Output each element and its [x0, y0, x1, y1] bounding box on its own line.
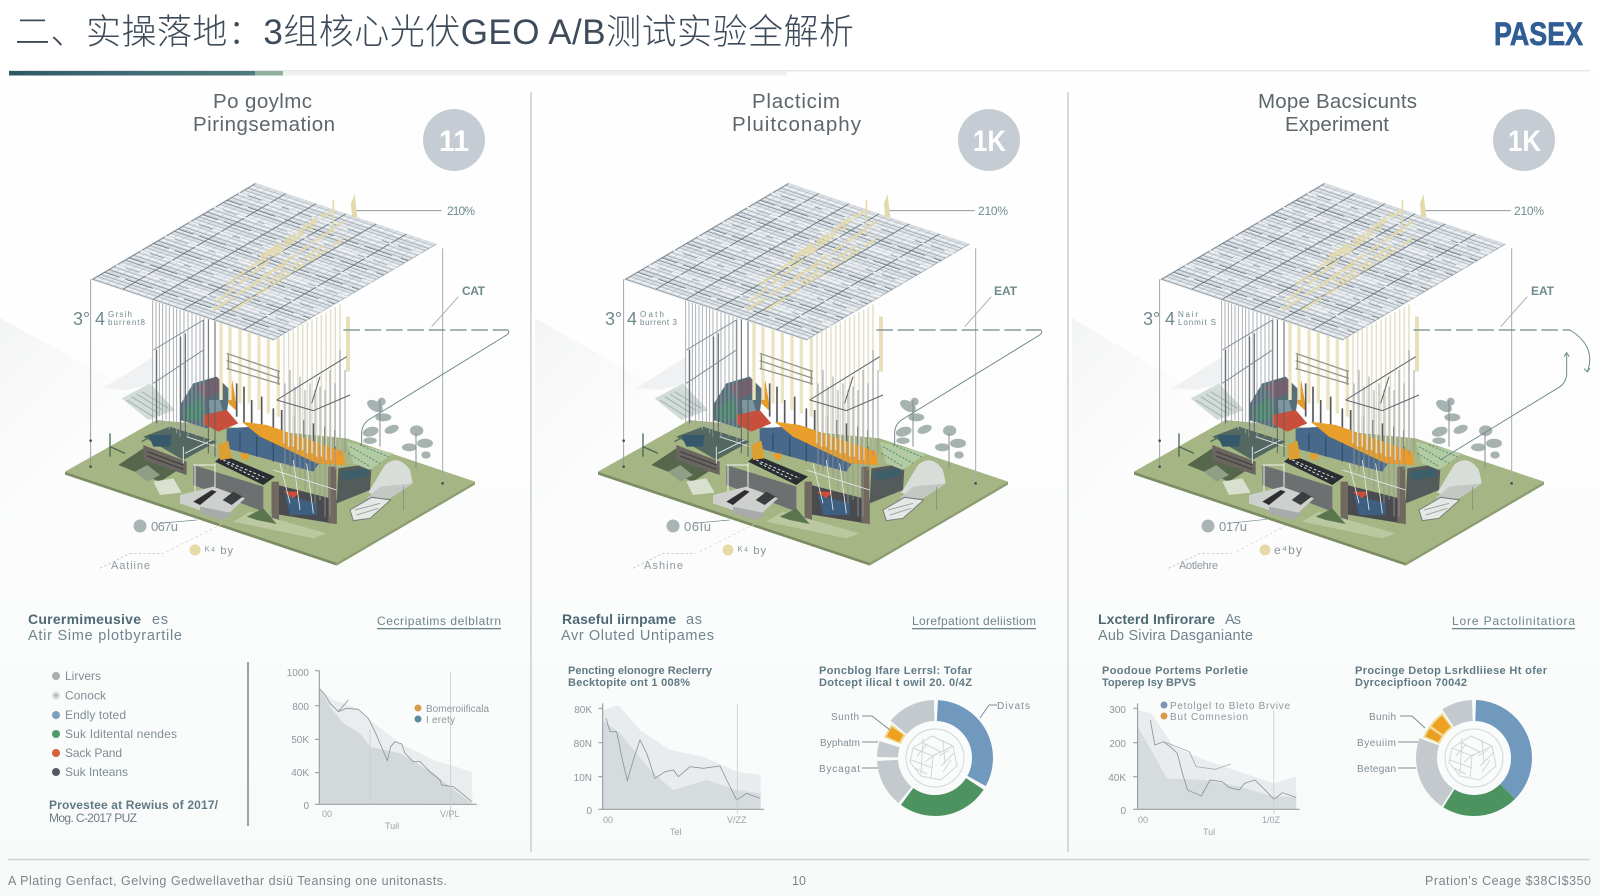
- badge: experiment 3: 1K: [1508, 125, 1541, 158]
- area chart 2: 00: [603, 815, 613, 825]
- annotation labels 3: Aotlehre: [1179, 560, 1218, 572]
- summary heading 2: Raseful iirnpame: [562, 611, 676, 627]
- legend list: Sack Pand: [65, 746, 122, 760]
- link 2: Lorefpationt deliistiom: [912, 614, 1036, 628]
- area chart 2: 80N: [574, 739, 592, 750]
- annotation labels 2: 06Iu: [684, 519, 711, 534]
- chart caption 3b: [1355, 665, 1548, 689]
- area chart 3: But Comnesion: [1170, 712, 1248, 723]
- summary heading 3: As: [1225, 612, 1241, 628]
- link 3: Lore Pactolinitatiora: [1452, 614, 1575, 628]
- annotation leaders 1: [100, 330, 509, 568]
- title: 二、实操落地：3组核心光伏GEO A/B测试实验全解析: [15, 13, 854, 52]
- note 1: Mog. C-2017 PUZ: [49, 811, 137, 825]
- annotation labels 3: 3° 4: [1143, 309, 1175, 329]
- badge: experiment 2: [958, 109, 1020, 171]
- annotation labels 1: [73, 204, 486, 572]
- panel: experiment 3: [1098, 90, 1590, 837]
- note 1: Provestee at Rewius of 2017/: [49, 798, 219, 812]
- area chart 2: 0: [586, 806, 592, 817]
- annotation labels 3: Lonmit S: [1178, 318, 1216, 327]
- area chart 1: 0: [303, 801, 309, 812]
- area chart 1: 50K: [291, 735, 309, 746]
- badge: experiment 1: [423, 109, 485, 171]
- summary heading 2: [561, 611, 714, 644]
- heading: experiment 3: Mope Bacsicunts: [1258, 90, 1417, 113]
- area chart 2: 80K: [574, 705, 592, 716]
- annotation labels 1: 3° 4: [73, 309, 105, 329]
- chart caption 2: [568, 665, 713, 689]
- area chart 1: Bomeroiificala: [426, 704, 489, 715]
- legend list: [52, 669, 177, 779]
- area chart 1: 800: [292, 702, 309, 713]
- summary heading 1: es: [152, 612, 168, 628]
- heading: experiment 2: Placticim: [752, 90, 840, 113]
- area chart 1: 40K: [291, 768, 309, 779]
- badge: experiment 3: [1493, 109, 1555, 171]
- area chart 1: V/PL: [440, 809, 460, 819]
- annotation labels 3: EAT: [1531, 284, 1555, 298]
- chart caption 3: Poodoue Portems Porletie: [1102, 665, 1248, 677]
- summary heading 1: Atir Sime plotbyrartile: [28, 628, 182, 644]
- footer right: Pration's Ceage $38CI$350: [1425, 874, 1591, 888]
- chart caption 2: Becktopite ont 1 008%: [568, 677, 690, 689]
- annotation labels 3: 017u: [1219, 519, 1247, 534]
- annotation labels 1: burrent8: [108, 318, 146, 327]
- summary heading 3: Aub Sivira Dasganiante: [1098, 628, 1253, 644]
- area chart 2: V/ZZ: [727, 815, 747, 825]
- donut chart 2: [819, 701, 1030, 806]
- summary heading 2: Avr Oluted Untipames: [561, 628, 714, 644]
- annotation labels 3: 210%: [1514, 204, 1544, 218]
- area chart 3: 00: [1138, 815, 1148, 825]
- donut chart 2: Divats: [997, 701, 1030, 712]
- annotation labels 3: [1143, 204, 1555, 572]
- chart caption 3b: Procinge Detop Lsrkdliiese Ht ofer: [1355, 665, 1548, 677]
- donut chart 3: Betegan: [1357, 764, 1396, 775]
- annotation labels 2: Ashine: [644, 560, 683, 572]
- badge: experiment 2: 1K: [973, 125, 1006, 158]
- illustration: solar building 2: [598, 183, 1008, 566]
- legend list: Suk Iditental nendes: [65, 727, 177, 741]
- heading: experiment 3: Experiment: [1285, 113, 1389, 136]
- chart caption 3: Toperep Isy BPVS: [1102, 677, 1196, 689]
- annotation labels 1: ᴷ⁴ by: [205, 545, 234, 557]
- chart caption 2b: Poncblog Ifare Lerrsl: Tofar: [819, 665, 973, 677]
- page number: 10: [792, 874, 806, 888]
- annotation labels 1: 210%: [447, 204, 475, 218]
- chart caption 2b: [819, 665, 973, 689]
- panel dividers: [531, 92, 1068, 852]
- chart caption 2b: Dotcept ilical t owil 20. 0/4Z: [819, 677, 972, 689]
- donut chart 3: Bunih: [1369, 712, 1396, 723]
- area chart 3: 0: [1120, 806, 1126, 817]
- annotation labels 1: Aatiine: [111, 560, 150, 572]
- area chart 2: [574, 703, 764, 837]
- area chart 1: I erety: [426, 715, 455, 726]
- heading: experiment 1: [193, 90, 335, 136]
- illustration: solar building 3: [1134, 183, 1544, 566]
- chart caption 3: [1102, 665, 1248, 689]
- illustration: solar building 1: [65, 183, 475, 566]
- summary heading 2: as: [686, 612, 702, 628]
- heading: experiment 1: Piringsemation: [193, 113, 335, 136]
- heading: experiment 3: [1258, 90, 1417, 136]
- chart caption 3b: Dyrcecipfioon 70042: [1355, 677, 1467, 689]
- area chart 1: 1000: [287, 668, 309, 679]
- annotation labels 1: Grsih: [108, 310, 132, 319]
- donut chart 2: Bycagat: [819, 764, 860, 775]
- area chart 3: 300: [1109, 705, 1126, 716]
- note 1: [49, 798, 219, 825]
- annotation labels 2: 210%: [978, 204, 1008, 218]
- annotation labels 2: ᴷ⁴ by: [738, 545, 766, 557]
- annotation leaders 3: [1168, 330, 1590, 568]
- legend list: Endly toted: [65, 708, 126, 722]
- area chart 3: Tul: [1203, 827, 1215, 837]
- annotation labels 2: Oath: [640, 310, 664, 319]
- area chart 3: 1/0Z: [1262, 815, 1281, 825]
- legend list: Lirvers: [65, 669, 101, 683]
- link 1: Cecripatims delblatrn: [377, 614, 501, 628]
- area chart 3: Petolgel to Bleto Brvive: [1170, 701, 1290, 712]
- summary heading 1: [28, 611, 182, 644]
- area chart 2: Tel: [670, 827, 682, 837]
- area chart 1: 00: [322, 809, 332, 819]
- annotation leaders 2: [633, 330, 1042, 568]
- area chart 2: 10N: [574, 773, 592, 784]
- annotation labels 1: CAT: [462, 284, 486, 298]
- donut chart 3: Byeuiim: [1357, 738, 1396, 749]
- header rule: [9, 70, 1590, 76]
- area chart 3: 200: [1109, 739, 1126, 750]
- summary heading 1: Curermimeusive: [28, 611, 141, 627]
- panel: experiment 1: [28, 90, 509, 831]
- annotation labels 2: burrent 3: [640, 318, 678, 327]
- badge: experiment 1: 11: [439, 125, 469, 158]
- area chart 1: [287, 668, 489, 831]
- legend list: Conock: [65, 688, 107, 702]
- annotation labels 2: EAT: [994, 284, 1018, 298]
- area chart 1: Tuil: [385, 821, 399, 831]
- summary heading 3: [1098, 611, 1253, 644]
- area chart 3: [1108, 701, 1300, 837]
- panel: experiment 2: [561, 90, 1042, 837]
- annotation labels 3: Nair: [1178, 310, 1198, 319]
- footer left: A Plating Genfact, Gelving Gedwellavethar dsiü Teansing one unitonasts.: [8, 874, 447, 888]
- annotation labels 2: 3° 4: [605, 309, 637, 329]
- donut chart 3: [1357, 710, 1522, 806]
- heading: experiment 2: Pluitconaphy: [732, 113, 862, 136]
- logo: PASEX: [1494, 16, 1584, 52]
- donut chart 2: Byphatm: [820, 738, 860, 749]
- chart caption 2: Pencting elonogre Reclerry: [568, 665, 713, 677]
- heading: experiment 2: [732, 90, 862, 136]
- area chart 3: 40K: [1108, 773, 1126, 784]
- annotation labels 1: 067u: [151, 519, 178, 534]
- annotation labels 2: [605, 204, 1018, 572]
- heading: experiment 1: Po goylmc: [213, 90, 312, 113]
- annotation labels 3: e⁴by: [1274, 543, 1302, 557]
- legend list: Suk Inteans: [65, 765, 128, 779]
- donut chart 2: Sunth: [831, 712, 859, 723]
- summary heading 3: Lxcterd Infirorare: [1098, 611, 1215, 627]
